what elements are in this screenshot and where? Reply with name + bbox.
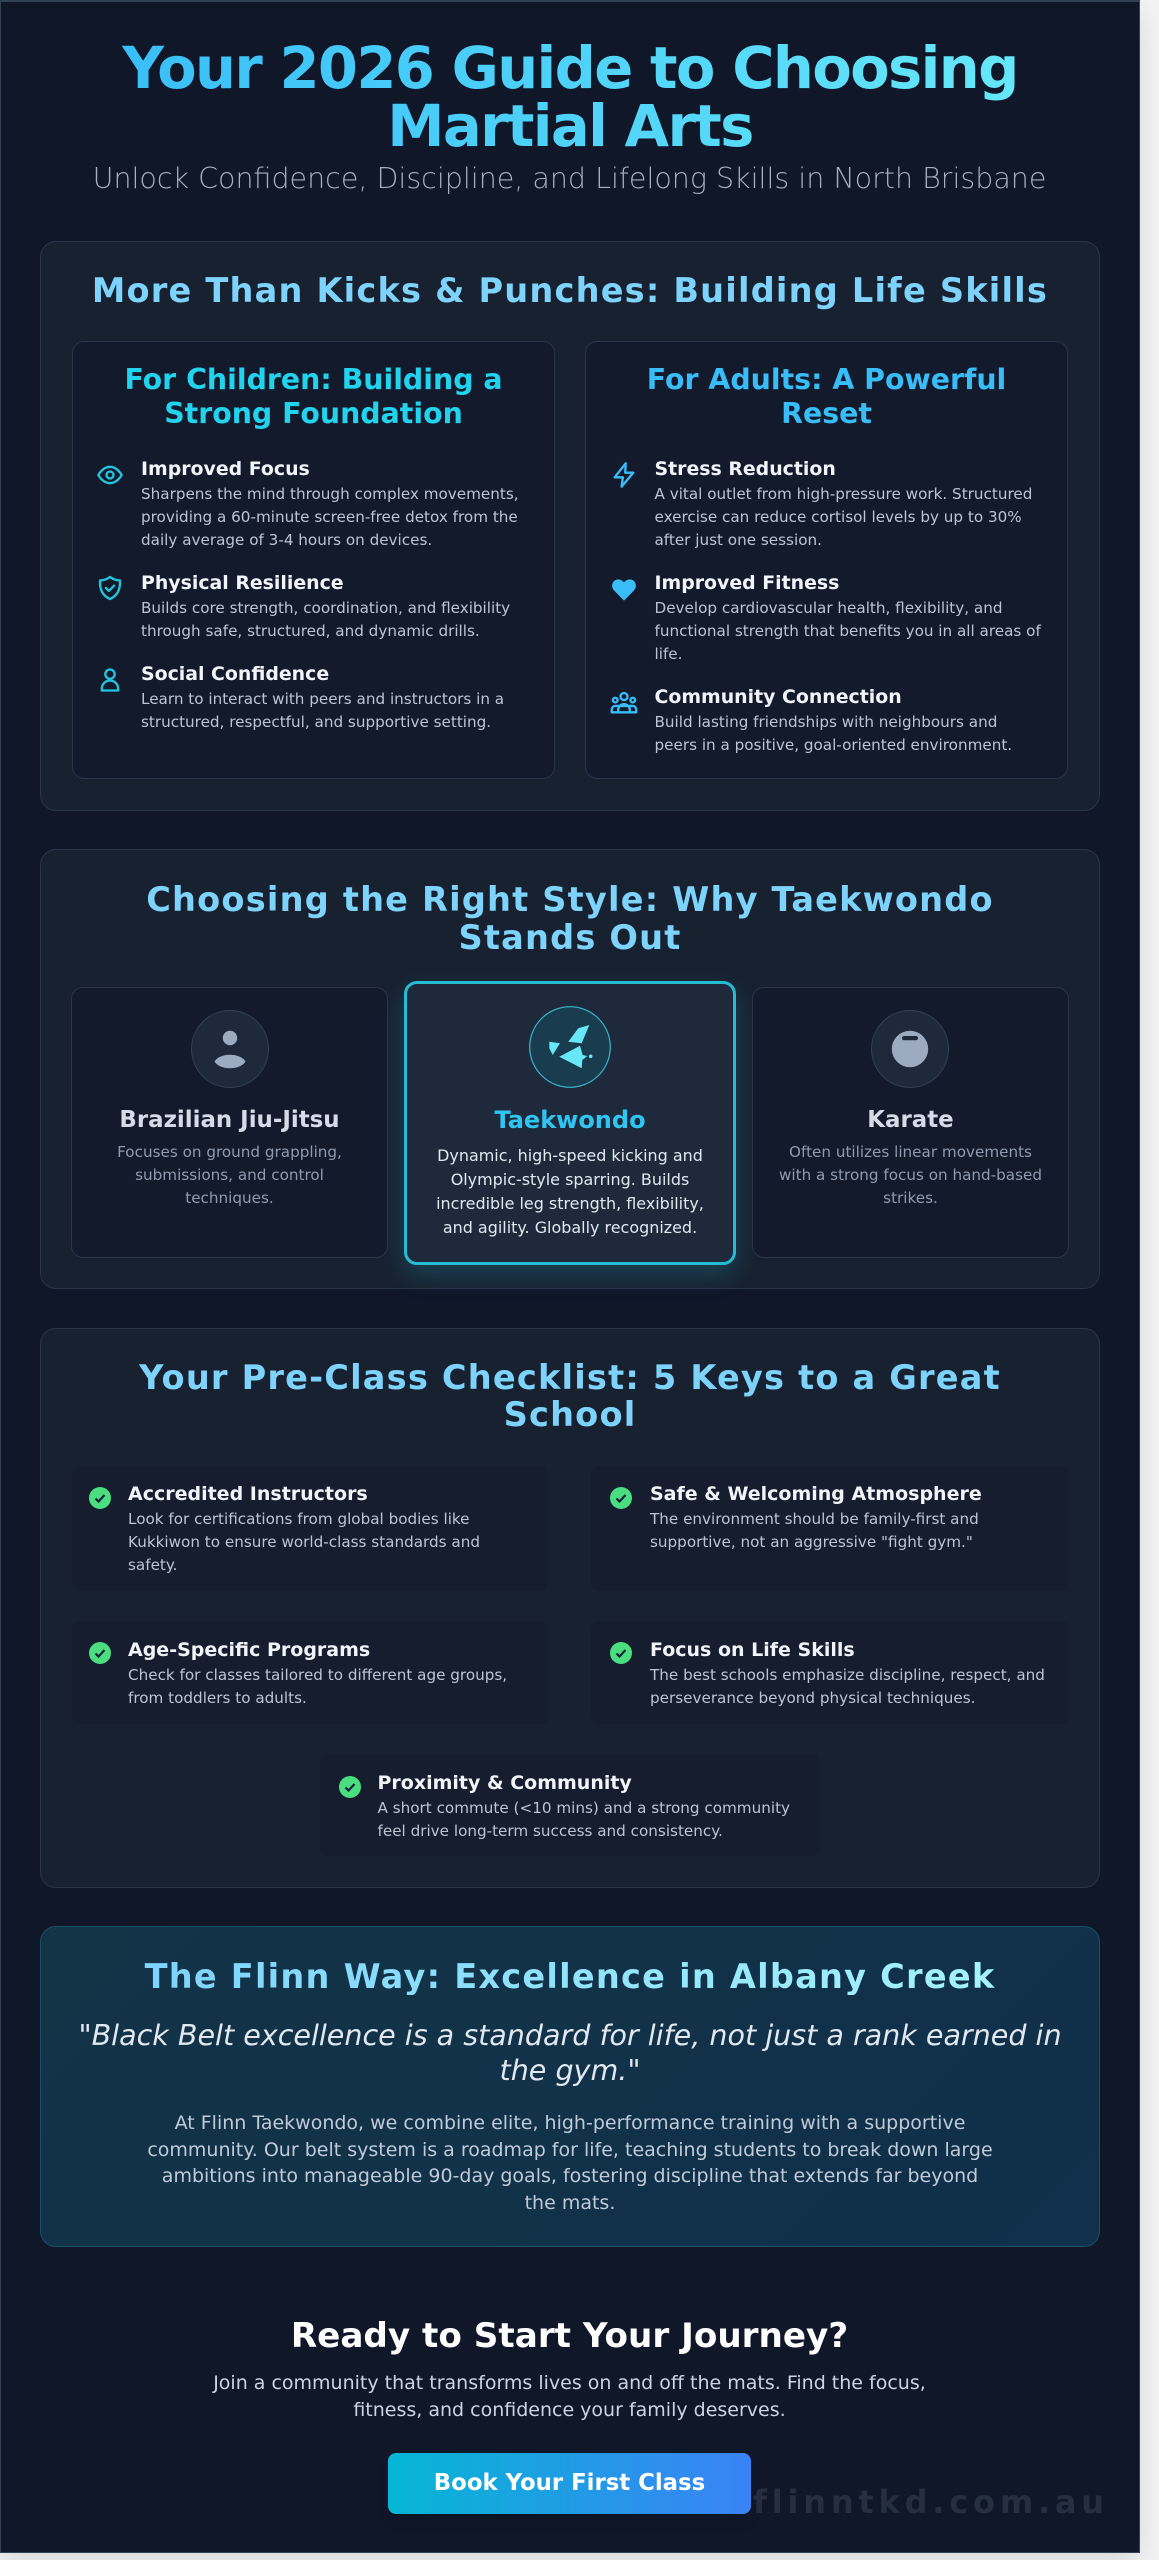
item: improved fitness: Develop cardiovascular health, flexibility, and — [654, 599, 1002, 617]
card text: bjj: Focuses on ground grappling, — [117, 1143, 342, 1161]
checklist item: life skills focus — [591, 1621, 1069, 1724]
item: improved focus: Sharpens the mind through complex movements, — [141, 485, 519, 503]
heading: checklist: Your Pre-Class Checklist: 5 Keys to a Great — [139, 1358, 1001, 1397]
quote — [78, 2018, 1062, 2086]
card: karate — [752, 987, 1069, 1258]
title — [100, 40, 1040, 165]
heading: the flinn way: The Flinn Way: Excellence in Albany Creek — [145, 1957, 995, 1996]
panel: life skills — [40, 241, 1100, 811]
heading: choosing style — [146, 880, 994, 957]
text: age-specific: Age-Specific Programs — [128, 1639, 370, 1661]
item: improved fitness: Improved Fitness — [654, 572, 839, 594]
panel: checklist — [40, 1328, 1100, 1888]
icon: check — [89, 1642, 111, 1664]
item: improved focus — [141, 458, 519, 549]
item: physical resilience: through safe, structured, and dynamic drills. — [141, 622, 480, 640]
item: improved focus: Improved Focus — [141, 458, 310, 480]
item: physical resilience: Builds core strength, coordination, and flexibility — [141, 599, 510, 617]
icon: lightning bolt — [614, 462, 634, 488]
item: social confidence — [141, 663, 504, 731]
button: book first class: Book Your First Class — [434, 2470, 705, 2496]
heading: for adults — [647, 363, 1006, 430]
checklist item: proximity — [320, 1754, 820, 1856]
text: call to action: Join a community that transforms lives on and off the mats. Find the focus, — [213, 2372, 926, 2394]
text: accredited instructors: Look for certifications from global bodies like — [128, 1510, 470, 1528]
item: social confidence: Social Confidence — [141, 663, 329, 685]
card text: taekwondo: Olympic-style sparring. Builds — [451, 1170, 689, 1188]
text: proximity: Proximity & Community — [378, 1772, 632, 1794]
item: community connection — [654, 686, 1012, 754]
title: Martial Arts — [387, 93, 753, 160]
text: accredited instructors: safety. — [128, 1556, 178, 1574]
card title: taekwondo: Taekwondo — [494, 1106, 646, 1134]
icon: check — [89, 1487, 111, 1509]
card text: taekwondo: and agility. Globally recognized. — [443, 1218, 697, 1236]
text: call to action: fitness, and confidence your family deserves. — [353, 2399, 786, 2421]
paragraph: flinn way: At Flinn Taekwondo, we combine elite, high-performance training with a supportive — [175, 2112, 965, 2134]
text: safe and welcoming — [650, 1483, 982, 1551]
card text: karate: with a strong focus on hand-based — [779, 1166, 1042, 1184]
text: age-specific — [128, 1639, 507, 1707]
subtitle: Unlock Confidence, Discipline, and Lifelong Skills in North Brisbane — [93, 162, 1046, 195]
button: book first class — [388, 2453, 751, 2514]
text: call to action — [212, 2372, 926, 2421]
paragraph: flinn way: community. Our belt system is a roadmap for life, teaching students to break down large — [147, 2139, 993, 2161]
paragraph: flinn way — [147, 2112, 993, 2214]
text: proximity: feel drive long-term success and consistency. — [378, 1822, 723, 1840]
text: proximity — [378, 1772, 790, 1840]
item: social confidence: Learn to interact with peers and instructors in a — [141, 690, 504, 708]
checklist item: age-specific — [72, 1621, 548, 1724]
text: accredited instructors — [128, 1483, 480, 1574]
icon: eye — [97, 466, 123, 484]
card text: bjj — [117, 1143, 342, 1207]
text: age-specific: Check for classes tailored to different age groups, — [128, 1666, 507, 1684]
card text: karate: Often utilizes linear movements — [789, 1143, 1032, 1161]
card text: karate: strikes. — [883, 1189, 938, 1207]
item: stress reduction: Stress Reduction — [654, 458, 836, 480]
panel: for children — [72, 341, 555, 779]
item: physical resilience — [141, 572, 510, 640]
item: community connection: Build lasting friendships with neighbours and — [654, 713, 997, 731]
text: safe and welcoming: supportive, not an aggressive "fight gym." — [650, 1533, 973, 1551]
card text: taekwondo: incredible leg strength, flexibility, — [436, 1194, 704, 1212]
text: life skills focus: perseverance beyond physical techniques. — [650, 1689, 975, 1707]
item: improved fitness: functional strength that benefits you in all areas of — [654, 622, 1041, 640]
icon: check — [610, 1642, 632, 1664]
item: community connection: peers in a positive, goal-oriented environment. — [654, 736, 1012, 754]
heading: for adults: For Adults: A Powerful — [647, 363, 1006, 396]
icon: taekwondo — [529, 1006, 611, 1088]
heading: call to action: Ready to Start Your Journey? — [291, 2316, 848, 2356]
card text: taekwondo: Dynamic, high-speed kicking and — [437, 1146, 703, 1164]
item: stress reduction — [654, 458, 1032, 549]
item: stress reduction: after just one session. — [654, 531, 822, 549]
heading: life skills: More Than Kicks & Punches: Building Life Skills — [92, 271, 1048, 310]
card title: bjj: Brazilian Jiu-Jitsu — [119, 1106, 340, 1132]
icon: heart — [612, 579, 636, 600]
icon: bjj — [191, 1010, 269, 1088]
icon: check — [339, 1776, 361, 1798]
card text: bjj: techniques. — [185, 1189, 274, 1207]
text: safe and welcoming: The environment should be family-first and — [650, 1510, 979, 1528]
text: life skills focus: The best schools emphasize discipline, respect, and — [650, 1666, 1045, 1684]
card: taekwondo — [404, 981, 736, 1265]
item: community connection: Community Connection — [654, 686, 902, 708]
heading: for children: For Children: Building a — [124, 363, 503, 396]
heading: for children — [124, 363, 503, 430]
card: brazilian jiu-jitsu — [71, 987, 388, 1258]
text: life skills focus — [650, 1639, 1045, 1707]
text: proximity: A short commute (<10 mins) and a strong community — [378, 1799, 790, 1817]
card text: karate — [779, 1143, 1042, 1207]
item: stress reduction: A vital outlet from high-pressure work. Structured — [654, 485, 1032, 503]
text: safe and welcoming: Safe & Welcoming Atmosphere — [650, 1483, 982, 1505]
heading: checklist: School — [504, 1395, 636, 1434]
icon: community — [610, 692, 638, 714]
item: improved fitness: life. — [654, 645, 682, 663]
card text: bjj: submissions, and control — [135, 1166, 324, 1184]
heading: choosing style: Choosing the Right Style: Why Taekwondo — [146, 880, 994, 919]
panel: for adults — [585, 341, 1068, 779]
checklist item: safe and welcoming — [591, 1466, 1069, 1591]
item: stress reduction: exercise can reduce cortisol levels by up to 30% — [654, 508, 1022, 526]
text: life skills focus: Focus on Life Skills — [650, 1639, 855, 1661]
card title: karate: Karate — [867, 1106, 954, 1132]
panel: choosing style — [40, 849, 1100, 1289]
icon: check — [610, 1487, 632, 1509]
text: accredited instructors: Kukkiwon to ensure world-class standards and — [128, 1533, 480, 1551]
text: age-specific: from toddlers to adults. — [128, 1689, 307, 1707]
icon: user — [100, 668, 120, 692]
watermark: flinntkd.com.au — [753, 2483, 1109, 2521]
heading: choosing style: Stands Out — [458, 918, 682, 957]
item: improved fitness — [654, 572, 1042, 663]
item: improved focus: daily average of 3-4 hours on devices. — [141, 531, 432, 549]
heading: for adults: Reset — [781, 397, 872, 430]
checklist item: accredited instructors — [72, 1466, 548, 1591]
paragraph: flinn way: ambitions into manageable 90-day goals, fostering discipline that extends far beyond — [162, 2165, 978, 2187]
text: accredited instructors: Accredited Instructors — [128, 1483, 368, 1505]
item: improved focus: providing a 60-minute screen-free detox from the — [141, 508, 518, 526]
paragraph: flinn way: the mats. — [525, 2192, 615, 2214]
item: social confidence: structured, respectful, and supportive setting. — [141, 713, 491, 731]
card text: taekwondo — [436, 1146, 704, 1236]
item: physical resilience: Physical Resilience — [141, 572, 344, 594]
heading: for children: Strong Foundation — [164, 397, 463, 430]
title: Your 2026 Guide to Choosing — [122, 35, 1018, 102]
quote: the gym." — [500, 2052, 640, 2086]
panel: the flinn way — [40, 1926, 1100, 2247]
icon: shield check — [98, 576, 122, 600]
quote: "Black Belt excellence is a standard for life, not just a rank earned in — [78, 2018, 1062, 2052]
heading: checklist — [138, 1358, 1001, 1434]
icon: karate — [871, 1010, 949, 1088]
